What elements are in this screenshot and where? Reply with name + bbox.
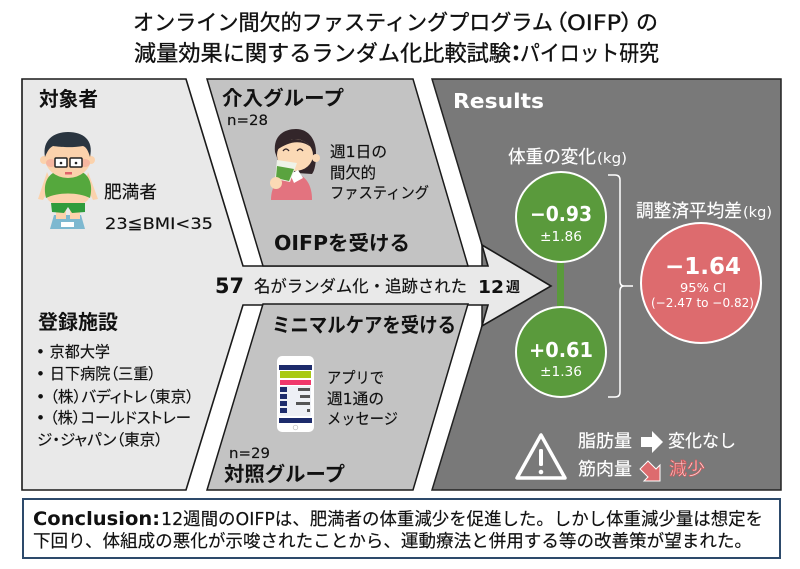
text: randomised and followed: 57 xyxy=(215,274,244,298)
title: 減量効果に関するランダム化比較試験 xyxy=(134,42,511,67)
title: ： xyxy=(505,42,527,67)
text: enrolment sites: • 京都大学 xyxy=(36,343,110,361)
icon: right arrow xyxy=(641,431,663,453)
text: muscle mass decreased xyxy=(578,460,705,481)
text: muscle mass decreased: 筋肉量 xyxy=(578,460,632,480)
circle: intervention change xyxy=(516,172,606,262)
icon: obese man on scale xyxy=(38,132,98,229)
circle: intervention change: ±1.86 xyxy=(540,229,582,245)
text: obese criteria: 23≦BMI<35 xyxy=(105,214,213,233)
text: randomised and followed: 名がランダム化・追跡された xyxy=(254,277,467,296)
panel: control group: n=29 xyxy=(229,446,270,462)
text: obese criteria xyxy=(104,183,213,233)
text: obese criteria: 肥満者 xyxy=(104,183,157,203)
chart: body weight change: 体重の変化 xyxy=(508,147,596,168)
icon: smartphone app xyxy=(277,356,314,432)
text: fat mass unchanged xyxy=(578,431,736,453)
panel: control group xyxy=(207,304,468,490)
chart: adjusted mean difference: −1.64 xyxy=(665,254,741,280)
title xyxy=(133,11,659,67)
chart: adjusted mean difference: 95% CI xyxy=(680,280,726,295)
panel: control group: 対照グループ xyxy=(224,462,345,486)
circle: control change xyxy=(516,307,606,397)
text: enrolment sites: • （株）コールドストレー xyxy=(36,409,191,427)
text: enrolment sites: • 日下病院（三重） xyxy=(36,365,156,383)
callout: conclusion xyxy=(23,499,780,558)
callout: conclusion: 下回り、体組成の悪化が示唆されたことから、運動療法と併用する等の改善策が望まれた。 xyxy=(33,532,752,552)
circle: intervention change: −0.93 xyxy=(530,202,592,226)
panel: intervention group: OIFPを受ける xyxy=(274,231,410,255)
chart: adjusted mean difference: (kg) xyxy=(743,205,772,221)
circle: control change: ±1.36 xyxy=(540,364,582,380)
chart: adjusted mean difference: 調整済平均差 xyxy=(636,201,742,222)
text: one-day fasting: 週1日の xyxy=(330,143,387,161)
callout: conclusion: 12週間のOIFPは、肥満者の体重減少を促進した。しかし体重減少量は想定を xyxy=(161,510,763,530)
bracket xyxy=(608,175,633,397)
circle: control change: +0.61 xyxy=(529,338,593,362)
text: weekly message: 週1通の xyxy=(327,390,384,408)
panel: intervention group xyxy=(207,79,468,266)
icon: warning triangle xyxy=(517,435,565,478)
chart: body weight change xyxy=(508,147,627,397)
text: enrolment sites: 登録施設 xyxy=(38,310,118,334)
text: one-day fasting: ファスティング xyxy=(330,184,429,202)
panel: control group: ミニマルケアを受ける xyxy=(272,313,456,337)
text: weekly message: メッセージ xyxy=(327,410,398,428)
chart: adjusted mean difference xyxy=(636,201,772,343)
panel: enrolment arrow xyxy=(22,79,551,490)
title: パイロット研究 xyxy=(520,42,659,67)
text: enrolment sites: • （株）バディトレ（東京） xyxy=(36,387,194,406)
panel: intervention group: n=28 xyxy=(227,113,268,129)
title: （OIFP） xyxy=(555,11,633,36)
text: weekly message: アプリで xyxy=(327,369,384,387)
text: muscle mass decreased: 減少 xyxy=(669,460,705,480)
text: one-day fasting: 間欠的 xyxy=(330,164,376,182)
callout: conclusion: Conclusion: xyxy=(33,508,160,530)
text: randomised and followed: 12 xyxy=(478,277,504,298)
text: enrolment sites: ジ・ジャパン（東京） xyxy=(37,431,163,449)
icon: woman drinking green juice xyxy=(270,129,320,200)
text: randomised and followed: 週 xyxy=(506,280,520,296)
icon: down-right arrow xyxy=(640,461,660,481)
text: fat mass unchanged: 変化なし xyxy=(668,432,736,452)
panel: results: Results xyxy=(453,89,544,113)
text: weekly message xyxy=(327,369,398,428)
text: fat mass unchanged: 脂肪量 xyxy=(578,432,632,452)
text: randomised and followed xyxy=(215,274,520,298)
text: target population: 対象者 xyxy=(39,87,98,111)
chart: adjusted mean difference: (−2.47 to −0.82) xyxy=(651,295,754,310)
text: enrolment sites xyxy=(36,310,194,449)
title: の xyxy=(636,11,658,36)
text: target population xyxy=(38,87,213,233)
text: one-day fasting xyxy=(330,143,429,202)
chart: body weight change: (kg) xyxy=(597,151,627,167)
title: オンライン間欠的ファスティングプログラム xyxy=(133,11,553,36)
panel: intervention group: 介入グループ xyxy=(222,86,344,110)
